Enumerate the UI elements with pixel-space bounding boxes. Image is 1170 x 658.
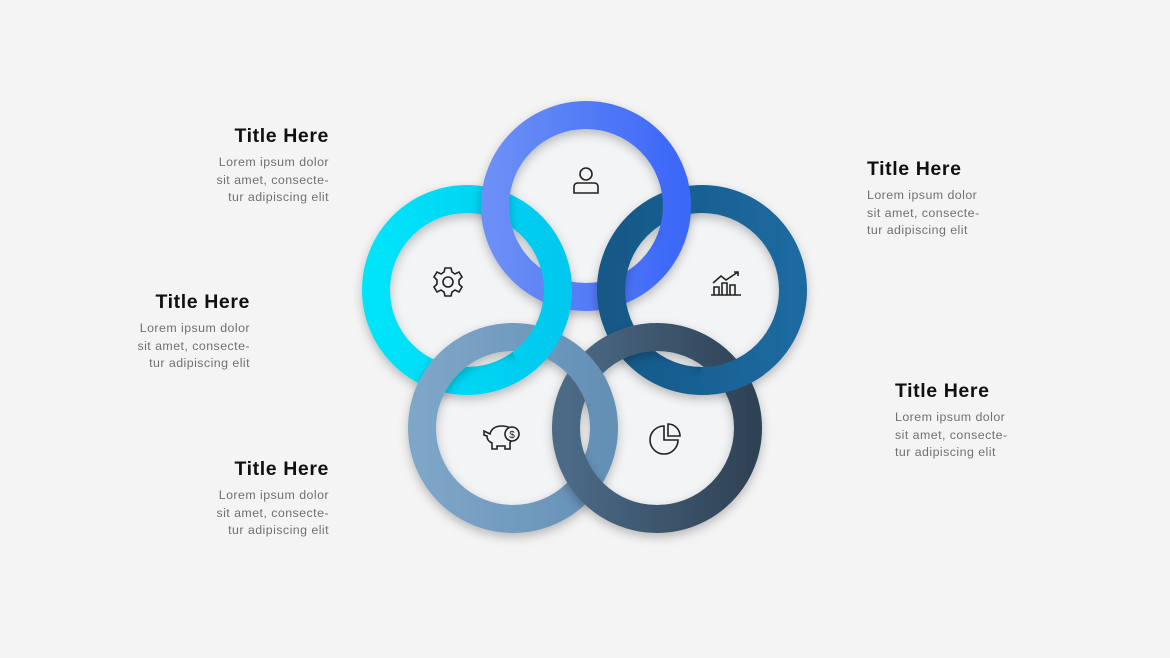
interlock overlays (412, 173, 764, 514)
text block: middle left (137, 291, 250, 370)
inner discs (390, 129, 779, 505)
text block: middle left: Title Here (155, 291, 250, 313)
text block: bottom right (895, 380, 1008, 459)
ring: cyan (376, 199, 558, 381)
text block: top right: tur adipiscing elit (867, 223, 968, 237)
text block: bottom right: Title Here (895, 380, 990, 402)
text block: top left: Title Here (234, 125, 329, 147)
text block: bottom left (216, 458, 329, 537)
icon: piggy bank (484, 426, 519, 449)
text block: bottom left: tur adipiscing elit (228, 523, 329, 537)
text block: top left: Lorem ipsum dolor (219, 155, 329, 169)
text block: top left (216, 125, 329, 204)
ring: slate (566, 337, 748, 519)
text block: top left: sit amet, consecte- (216, 172, 329, 186)
ring: top blue (495, 115, 677, 297)
text block: middle left: sit amet, consecte- (137, 338, 250, 352)
diagram: interlocking rings (356, 100, 812, 542)
icon: pie chart (650, 424, 680, 454)
ring: dark blue (611, 199, 793, 381)
text block: bottom left: Title Here (234, 458, 329, 480)
text block: bottom right: tur adipiscing elit (895, 445, 996, 459)
text block: top right (867, 158, 980, 237)
icon: gear (434, 268, 462, 296)
icon: piggy bank: $ (509, 430, 515, 441)
ring: grey blue (422, 337, 604, 519)
text block: top right: Title Here (867, 158, 962, 180)
text block: top right: Lorem ipsum dolor (867, 188, 977, 202)
text block: bottom right: Lorem ipsum dolor (895, 410, 1005, 424)
text block: top left: tur adipiscing elit (228, 190, 329, 204)
text block: middle left: tur adipiscing elit (149, 356, 250, 370)
icon: chart (711, 272, 741, 295)
icon: person (574, 168, 598, 193)
text block: bottom left: sit amet, consecte- (216, 506, 329, 520)
text block: middle left: Lorem ipsum dolor (140, 321, 250, 335)
text block: bottom left: Lorem ipsum dolor (219, 488, 329, 502)
text block: top right: sit amet, consecte- (867, 206, 980, 220)
text block: bottom right: sit amet, consecte- (895, 428, 1008, 442)
